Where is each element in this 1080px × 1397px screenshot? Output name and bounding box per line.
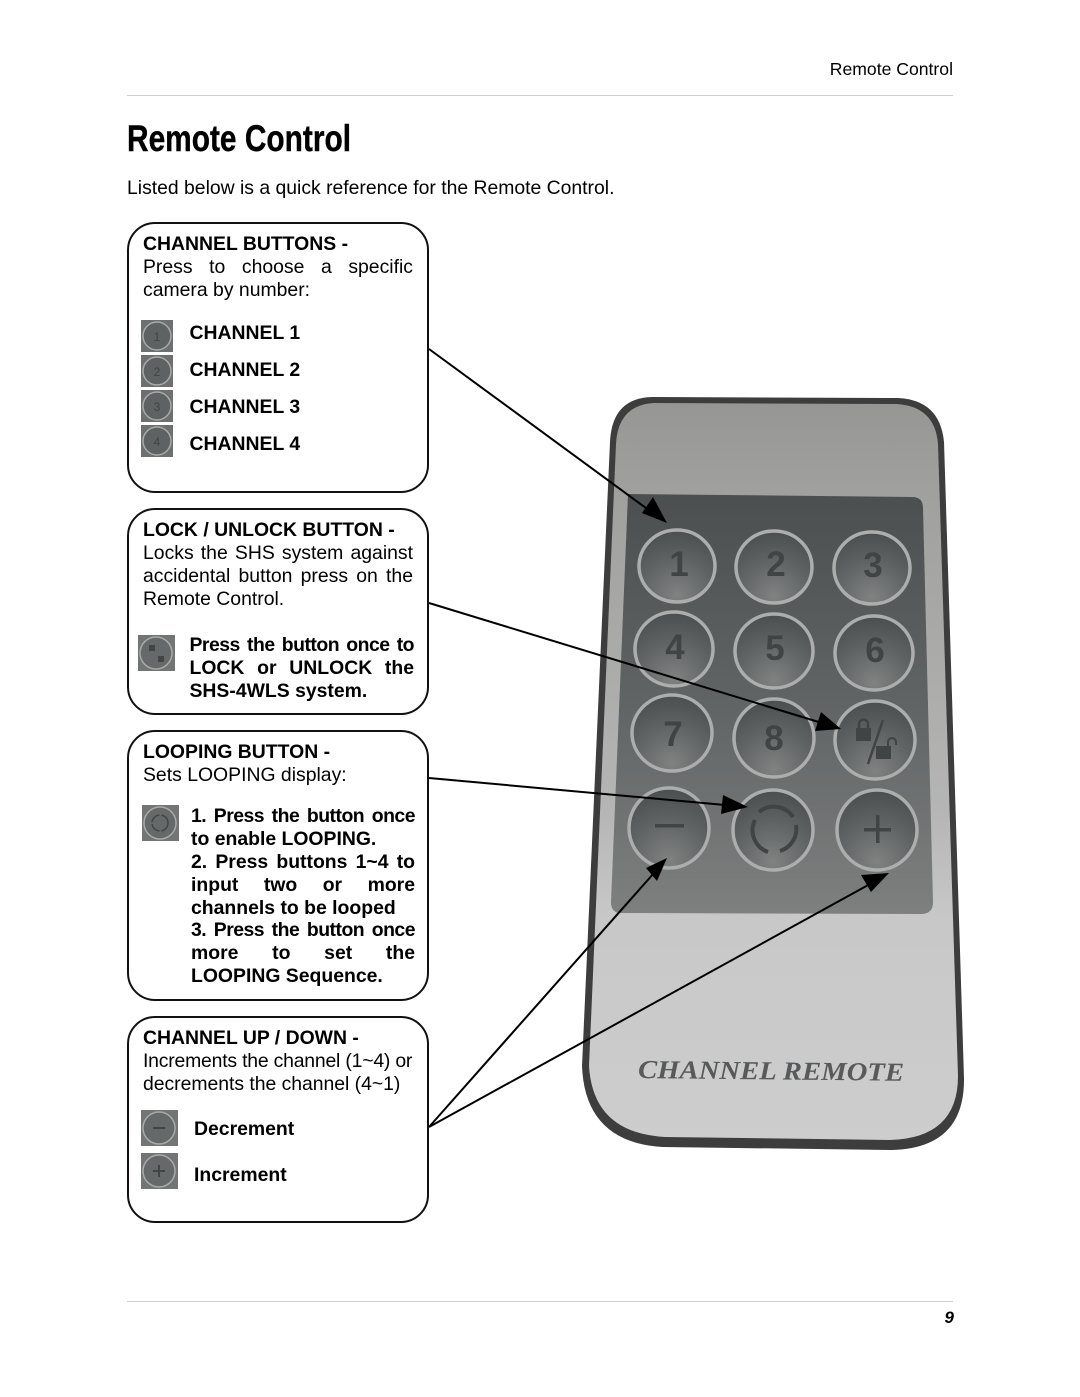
icon: channel 1: 1	[154, 330, 161, 344]
keypad buttons	[629, 530, 917, 870]
channel up down text: Increment	[194, 1164, 287, 1186]
looping text: 2. Press buttons 1~4 to	[191, 851, 415, 873]
looping text: channels to be looped	[191, 897, 396, 919]
lock unlock text: SHS-4WLS system.	[190, 680, 367, 702]
keypad digits: 6	[865, 631, 885, 670]
channel up down text	[143, 1027, 412, 1186]
keypad digits	[663, 545, 885, 758]
arrow: increment	[429, 873, 889, 1127]
channel up down text: Decrement	[194, 1118, 294, 1140]
icon: channel 4	[141, 425, 173, 457]
channel buttons text	[143, 233, 413, 455]
icon: decrement	[141, 1110, 178, 1146]
channel up down text: decrements the channel (4~1)	[143, 1073, 400, 1095]
arrow: channel buttons	[429, 349, 667, 523]
channel buttons text: CHANNEL 4	[190, 433, 300, 455]
looping text	[143, 741, 415, 987]
arrow: decrement	[429, 858, 667, 1127]
lock unlock text: LOCK or UNLOCK the	[190, 657, 414, 679]
channel buttons text: CHANNEL 2	[190, 359, 300, 381]
looping text: Sets LOOPING display:	[143, 764, 347, 786]
icon: lock button	[138, 635, 175, 671]
lock unlock symbol	[856, 720, 896, 764]
keypad digits: 5	[765, 629, 785, 668]
lock unlock text: Remote Control.	[143, 588, 284, 610]
remote label: CHANNEL REMOTE	[638, 1055, 904, 1087]
lock unlock text: Press the button once to	[190, 634, 414, 656]
footer rule	[127, 1301, 953, 1302]
looping text: 1. Press the button once	[191, 805, 415, 827]
looping text: LOOPING BUTTON -	[143, 741, 330, 763]
keypad digits: 4	[665, 628, 685, 667]
icon: channel 4: 4	[154, 435, 161, 449]
channel buttons text: CHANNEL 1	[190, 322, 300, 344]
panel: lock unlock button	[127, 508, 429, 715]
panel: channel buttons	[127, 222, 429, 493]
channel buttons text: CHANNEL 3	[190, 396, 300, 418]
keypad digits: 7	[663, 715, 683, 754]
panel: channel up down	[127, 1016, 429, 1223]
keypad digits: 2	[766, 545, 786, 584]
title: Remote Control	[127, 118, 351, 159]
lock unlock text: LOCK / UNLOCK BUTTON -	[143, 519, 395, 541]
channel up down text: Increments the channel (1~4) or	[143, 1050, 412, 1072]
arrow: lock button	[429, 603, 841, 731]
looping text: more to set the	[191, 942, 415, 964]
channel buttons text: Press to choose a specific	[143, 256, 413, 278]
arrow: looping button	[429, 778, 748, 814]
lock unlock text: Locks the SHS system against	[143, 542, 413, 564]
keypad digits: 3	[863, 546, 883, 585]
icon: channel 3	[141, 390, 173, 422]
minus and plus symbols	[655, 815, 891, 843]
keypad digits: 8	[764, 719, 784, 758]
icon: channel 2	[141, 355, 173, 387]
lock unlock text: accidental button press on the	[143, 565, 413, 587]
icon: channel 2: 2	[154, 365, 161, 379]
looping text: to enable LOOPING.	[191, 828, 376, 850]
channel buttons text: camera by number:	[143, 279, 310, 301]
keypad digits: 1	[669, 545, 689, 584]
looping text: input two or more	[191, 874, 415, 896]
icon: channel 1	[141, 320, 173, 352]
loop symbol	[753, 807, 796, 852]
icon: channel 3: 3	[154, 400, 161, 414]
page number: 9	[945, 1308, 954, 1327]
intro text: Listed below is a quick reference for the Remote Control.	[127, 177, 614, 199]
icon: looping button	[142, 805, 179, 841]
lock unlock text	[143, 519, 414, 702]
running header: Remote Control	[830, 59, 953, 79]
looping text: LOOPING Sequence.	[191, 965, 383, 987]
channel up down text: CHANNEL UP / DOWN -	[143, 1027, 359, 1049]
looping text: 3. Press the button once	[191, 919, 415, 941]
icon: increment	[141, 1153, 178, 1189]
panel: looping button	[127, 730, 429, 1001]
channel buttons text: CHANNEL BUTTONS -	[143, 233, 348, 255]
